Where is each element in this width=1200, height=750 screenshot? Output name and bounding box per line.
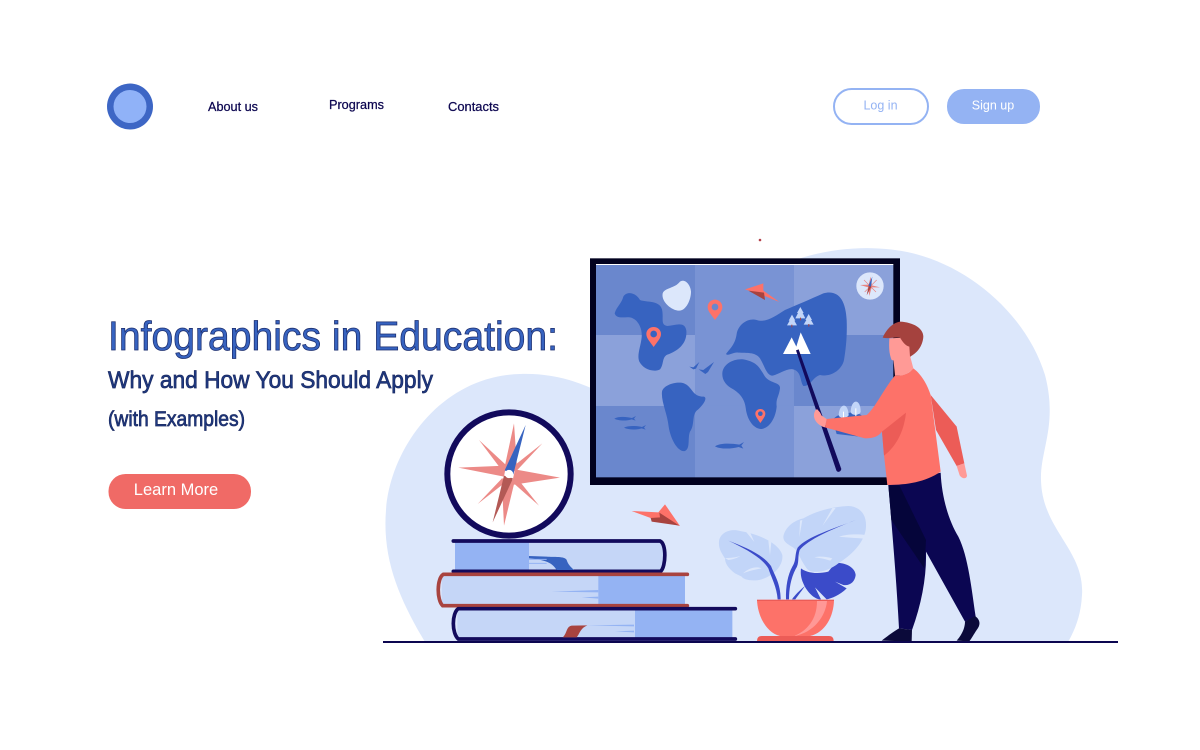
logo	[107, 84, 153, 130]
button: Sign up	[947, 89, 1040, 124]
sweater	[825, 368, 941, 485]
continent: North America	[615, 293, 686, 371]
trouser shadow	[888, 485, 926, 568]
pine trees	[787, 307, 814, 327]
leaf: left	[719, 530, 782, 580]
trousers	[888, 473, 976, 630]
map pin: North America	[646, 327, 661, 347]
left shoe	[882, 628, 912, 641]
paper plane	[632, 504, 680, 526]
continent: Africa	[722, 359, 780, 429]
background blob	[385, 248, 1082, 642]
neck	[893, 356, 913, 376]
pot highlight	[794, 601, 827, 636]
button: Learn More	[108, 474, 251, 509]
leaf: right	[783, 506, 866, 572]
wall map	[590, 258, 900, 485]
ground line	[383, 641, 1118, 643]
bottom book	[453, 609, 735, 639]
middle book	[438, 574, 687, 606]
compass	[447, 412, 571, 536]
small red dot	[759, 239, 761, 241]
book stack	[438, 541, 735, 639]
plant	[719, 506, 866, 641]
pointer stick	[796, 349, 841, 472]
pot	[757, 600, 834, 636]
island: Greenland	[662, 281, 691, 311]
map panels	[596, 264, 893, 477]
compass star long points	[458, 423, 560, 526]
fish	[614, 416, 744, 449]
title: Infographics in Education:	[108, 313, 558, 359]
compass pivot	[505, 470, 513, 478]
sweater shadow	[882, 413, 906, 456]
button: Log in	[834, 89, 928, 124]
hair	[883, 322, 923, 357]
birds	[689, 362, 714, 374]
subtitle line 1: Why and How You Should Apply	[108, 367, 433, 394]
pot rim	[757, 600, 834, 601]
subtitle line 2: (with Examples)	[108, 408, 245, 431]
button: Log in: Log in	[863, 98, 898, 112]
button: Sign up: Sign up	[972, 98, 1014, 112]
compass needle south	[493, 476, 513, 522]
nav link: Programs: Programs	[329, 97, 384, 112]
top book	[453, 541, 665, 571]
hand	[814, 409, 827, 427]
compass star short points	[478, 440, 542, 506]
map pin: Africa	[755, 409, 765, 423]
back hand	[957, 463, 967, 478]
leaf: dark	[801, 563, 856, 599]
continent: South America	[662, 383, 705, 451]
navigation bar	[107, 84, 1040, 130]
paper plane on map	[745, 283, 779, 302]
map frame	[590, 258, 900, 485]
button: Learn More: Learn More	[134, 481, 218, 499]
continent: Eurasia	[726, 293, 847, 386]
stems	[728, 520, 856, 599]
right shoe	[957, 616, 979, 641]
mountains	[783, 332, 811, 354]
compass needle north	[505, 425, 526, 474]
upper body	[796, 322, 967, 485]
map compass	[856, 272, 884, 300]
compass body	[447, 412, 571, 536]
nav link: About us: About us	[208, 99, 258, 114]
back arm	[931, 395, 964, 466]
island: small with trees	[833, 402, 866, 437]
pot base	[757, 636, 834, 641]
map pin: ocean	[708, 300, 722, 320]
face	[889, 338, 911, 361]
nav link: Contacts: Contacts	[448, 99, 499, 114]
person	[796, 322, 979, 641]
trousers and shoes	[882, 473, 979, 641]
